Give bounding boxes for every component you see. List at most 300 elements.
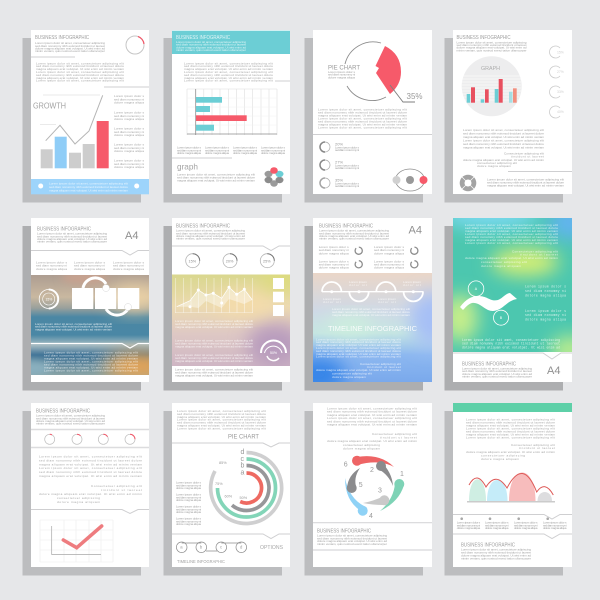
stat rings: 27% [557,70,564,74]
body text: consectetuer adipiscing elit [477,161,517,165]
footer text: sed diam nonummy nibh euismod tincidunt ut laoreet dolore [487,180,564,184]
wave graphic [460,281,517,325]
side text: Lorem ipsum dolor s [176,516,201,520]
side text: Lorem ipsum dolor s [176,492,201,496]
graph text: sed diam nonummy nibh euismod tincidunt ut laoreet dolore [177,175,255,179]
body text: magna aliquam erat volutpat. Ut wisi enim ad minim veniam [327,422,417,426]
body text: magna aliquam erat volutpat. Ut wisi enim ad minim veniam [36,67,124,71]
side text: dolore magna aliqua [525,293,566,297]
A4 label: A4 [547,365,560,377]
pie text [328,70,355,79]
captions: sed diam nonummy ni [205,148,229,152]
body text: consectetuer adipiscing [343,443,380,447]
timeline labels: Lorem ipsum [378,297,396,301]
body text: Consectetuer adipiscing elit [372,432,417,436]
title: BUSINESS INFOGRAPHIC [456,35,511,41]
intro text: minim veniam, quis nostrud exerci tation ullamcorper [176,237,245,241]
three text columns: Lorem ipsum dolor s [74,260,105,264]
intro text: sed diam nonummy nibh euismod tincidunt ut laoreet [319,231,389,235]
side text: dolore magna aliqua [176,486,201,490]
body text: magna aliquam erat volutpat. Ut wisi enim ad minim veniam [36,76,124,80]
photo body text: dolore magna aliquam erat volutpat. Ut wisi enim ad minim [316,368,401,372]
icon: flower [264,167,284,187]
chart in circle [462,56,522,116]
graph text: Lorem ipsum dolor sit amet, consectetuer adipiscing elit [177,172,255,176]
stat list: 27% [335,160,343,164]
photo body text: Lorem ipsum dolor sit amet, consectetuer adipiscing elit [316,355,401,359]
body text: consectetuer adipiscing [481,454,525,458]
options timeline: d [240,545,243,550]
side text: sed diam nonummy ni [114,130,144,134]
photo body text: tincidunt ut laoreet [367,365,401,369]
side text [114,94,144,169]
options timeline: b [200,545,203,550]
body text: sed diam nonummy nibh euismod tincidunt ut laoreet dolore [463,142,544,146]
photo body text [316,337,401,379]
intro text: sed diam nonummy nibh euismod tincidunt ut laoreet [36,416,105,420]
stat list: Lorem ipsum dolor s [335,164,359,168]
body text: tincidunt ut laoreet [511,155,544,159]
photo text: Lorem ipsum dolor sit amet, consectetuer adipiscing elit [175,319,253,323]
side text: dolore magna aliqua [114,117,144,121]
photo text: sed diam nonummy nibh euismod tincidunt ut laoreet dolore [465,235,558,239]
blue footer: sed diam nonummy nibh euismod tincidunt ut laoreet dolore [49,185,128,189]
captions: sed diam nonummy ni [177,148,201,152]
body text: Lorem ipsum dolor sit amet, consectetuer adipiscing elit [463,138,544,142]
concentric ring chart: 75% [215,482,223,486]
donut icon [39,290,58,308]
body text: Lorem ipsum dolor sit amet, consectetuer adipiscing elit [184,70,273,74]
intro text: Lorem ipsum dolor sit amet, consectetuer adipiscing [36,414,105,418]
side text: Lorem ipsum dolor s [525,285,566,289]
intro text: sed diam nonummy nibh euismod tincidunt ut laoreet [37,234,107,238]
page 1: growth [22,30,149,202]
intro text: Lorem ipsum dolor sit amet, consectetuer adipiscing [461,548,531,552]
captions [177,146,285,155]
body text: dolore magna aliquam erat volutpat. Ut wisi enim ad minim [463,158,544,162]
timeline labels: dolor sit [378,300,396,304]
intro text [37,232,107,244]
body text: magna aliquam erat volutpat. Ut wisi enim ad minim veniam [39,474,142,478]
four text columns: Lorem ipsum dolor s [543,521,567,525]
captions: sed diam nonummy ni [261,148,285,152]
stat rings: 15% [557,50,564,54]
body text: Consectetuer adipiscing elit [504,151,544,155]
intro text: Lorem ipsum dolor sit amet, consectetuer adipiscing [35,41,105,45]
text and ring rows: Lorem ipsum dolor s [319,245,349,249]
four text columns: Lorem ipsum dolor s [485,521,509,525]
intro text: dolore magna aliquam erat volutpat. Ut wisi enim ad [461,554,531,558]
body text: sed diam nonummy nibh euismod tincidunt ut laoreet dolore [466,420,555,424]
stat rings: 33% [557,90,564,94]
bottom photo text: Lorem ipsum dolor sit amet, consectetuer adipiscing [462,338,560,342]
body text: sed diam nonummy nibh euismod tincidunt ut laoreet dolore [327,419,417,423]
body text [466,417,555,461]
body text: Lorem ipsum dolor sit amet, consectetuer adipiscing elit [184,79,273,83]
side text: dolore magna aliqua [176,498,201,502]
four text columns: dolore magna aliqua [543,526,567,530]
intro text: sed diam nonummy nibh euismod tincidunt ut laoreet [35,44,105,48]
intro text [462,366,532,378]
body text: sed diam nonummy nibh euismod tincidunt ut laoreet dolore [39,458,142,462]
body text: sed diam nonummy nibh euismod tincidunt ut laoreet dolore [36,73,124,77]
green header [453,403,572,412]
body text: sed diam nonummy nibh euismod tincidunt ut laoreet dolore [184,73,273,77]
text and ring rows: sed diam nonummy ni [319,262,349,266]
photo body text: magna aliquam erat volutpat. Ut wisi enim ad minim veniam [44,356,138,360]
body text: dolore magna aliquam [477,164,511,168]
body text: Lorem ipsum dolor sit amet, consectetuer adipiscing elit [463,128,544,132]
white squares with arcs [72,278,139,315]
heading: pie chart: PIE CHART [328,64,360,72]
gradient photo [313,273,432,382]
footer text: magna aliquam erat volutpat. Ut wisi enim ad minim veniam [487,183,564,187]
photo text: Lorem ipsum dolor sit amet, consectetuer adipiscing elit [465,241,558,245]
photo body text: Lorem ipsum dolor sit amet, consectetuer adipiscing elit [316,337,401,341]
captions: sed diam nonummy ni [233,148,257,152]
heading: timeline infographic: TIMELINE INFOGRAPHIC [328,324,418,333]
body text: sed diam nonummy nibh euismod tincidunt ut laoreet dolore [36,64,124,68]
page 9: check chart [22,403,149,576]
body text: magna aliquam erat volutpat. Ut wisi enim ad minim veniam [463,145,544,149]
photo body text: sed diam nonummy nibh euismod tincidunt ut laoreet dolore [44,362,138,366]
white boxes [273,278,284,316]
photo body text: Lorem ipsum dolor sit amet, consectetuer adipiscing elit [44,350,138,354]
bottom photo text: dolore magna aliquam erat volutpat. Ut wisi enim ad [462,346,560,350]
captions: dolore magna aliqua [177,151,201,155]
three text columns: sed diam nonummy ni [113,264,144,268]
intro text: Lorem ipsum dolor sit amet, consectetuer adipiscing [317,534,387,538]
line chart [40,95,103,144]
side text: sed diam nonummy ni [114,162,144,166]
intro text: minim veniam, quis nostrud exerci tation ullamcorper [461,556,531,560]
body text: sed diam nonummy nibh euismod tincidunt ut laoreet dolore [463,132,544,136]
body text: Lorem ipsum dolor sit amet, consectetuer adipiscing elit [327,416,417,420]
side text: sed diam nonummy ni [176,483,201,487]
photo text: sed diam nonummy nibh euismod tincidunt ut laoreet dolore [465,226,558,230]
swirl cycle diagram: 5 [359,482,363,489]
gauge: 50% [270,351,277,355]
check line chart [40,520,113,562]
intro text [319,229,389,240]
timeline labels: dolor sit [349,283,367,287]
title: BUSINESS INFOGRAPHIC [462,361,516,367]
three text columns: Lorem ipsum dolor s [36,260,67,264]
photo text: dolore magna aliquam [481,264,521,268]
four text columns: sed diam nonummy ni [457,523,481,527]
teal header: BUSINESS INFOGRAPHIC [176,35,230,41]
intro text [461,548,531,560]
four text columns: Lorem ipsum dolor s [514,521,538,525]
photo text: sed diam nonummy nibh euismod tincidunt ut laoreet dolore [175,356,253,360]
three text columns: sed diam nonummy ni [74,264,105,268]
three text columns: sed diam nonummy ni [36,264,67,268]
text and ring rows: sed diam nonummy ni [319,248,349,252]
side text: dolore magna aliqua [114,133,144,137]
body text: consectetuer adipiscing [57,496,100,500]
body text: magna aliquam erat volutpat. Ut wisi enim ad minim veniam [327,413,417,417]
chevron divider [31,510,149,514]
title: BUSINESS INFOGRAPHIC [35,35,89,41]
body text: sed diam nonummy nibh euismod tincidunt ut laoreet dolore [184,64,273,68]
swirl cycle diagram [344,456,404,520]
body text: Lorem ipsum dolor sit amet, consectetuer adipiscing elit [177,426,266,430]
donut icon: 15% [46,298,52,302]
body text: tincidunt ut laoreet [519,446,555,450]
chevron divider [453,353,572,359]
line chart [175,278,253,313]
teal header: minim veniam, quis nostrud exerci tation ullamcorper [176,48,246,52]
intro text: Lorem ipsum dolor sit amet, consectetuer adipiscing [176,229,245,233]
captions: Lorem ipsum dolor s [233,146,257,150]
swirl cycle diagram: 1 [400,471,404,478]
side text: Lorem ipsum dolor s [114,143,144,147]
stat list: sed diam nonummy ni [335,166,359,170]
side text: Lorem ipsum dolor s [114,127,144,131]
photo text: Lorem ipsum dolor sit amet, consectetuer adipiscing elit [35,322,112,326]
chart in circle: GRAPH [481,66,500,72]
timeline [322,282,424,301]
photo text: consectetuer adipiscing elit [481,260,527,264]
body text: magna aliquam erat volutpat. Ut wisi enim ad minim veniam [184,67,273,71]
gauge [261,340,286,361]
photo body text: consectetuer adipiscing elit [332,372,372,376]
side text: dolore magna aliqua [176,510,201,514]
body text: tincidunt ut laoreet [380,436,417,440]
intro text: dolore magna aliquam erat volutpat. Ut wisi enim ad [319,234,389,238]
callout: 35%: 35% [406,92,423,101]
side text: sed diam nonummy ni [525,289,566,293]
pie text: sed diam nonummy ni [328,73,355,77]
photo body text: sed diam nonummy nibh euismod tincidunt ut laoreet dolore [316,349,401,353]
blurred photo background [31,275,149,375]
options timeline: a [180,545,183,550]
photo body text: sed diam nonummy nibh euismod tincidunt ut laoreet dolore [316,340,401,344]
four text columns: sed diam nonummy ni [514,523,538,527]
four text columns: dolore magna aliqua [457,526,480,530]
body text: Lorem ipsum dolor sit amet, consectetuer adipiscing elit [466,417,555,421]
white chevron divider [31,344,149,348]
photo text: Lorem ipsum dolor sit amet, consectetuer adipiscing elit [175,339,253,343]
intro text: sed diam nonummy nibh euismod tincidunt ut laoreet [462,369,532,373]
pie text: dolore magna aliqua [328,75,355,79]
four text columns: dolore magna aliqua [514,526,538,530]
gradient photo [453,218,572,352]
stat list: sed diam nonummy ni [335,184,359,188]
intro text: minim veniam, quis nostrud exerci tation ullamcorper [462,374,532,378]
bar chart [41,121,109,168]
title: BUSINESS INFOGRAPHIC [176,224,230,230]
intro text: dolore magna aliquam erat volutpat. Ut wisi enim ad [462,372,532,376]
intro text: Lorem ipsum dolor sit amet, consectetuer adipiscing [462,366,532,370]
three text columns: dolore magna aliqua [74,267,105,271]
body text: tincidunt ut laoreet [101,488,142,492]
gradient photo [172,274,290,366]
page 5: A4 brochure with photo [22,218,149,390]
A4 label: A4 [408,224,422,236]
body text: sed diam nonummy nibh euismod tincidunt ut laoreet dolore [177,412,266,416]
teal header [172,31,290,54]
timeline labels: dolor sit [323,300,341,304]
body text: magna aliquam erat volutpat. Ut wisi enim ad minim veniam [466,423,555,427]
swirl cycle diagram: 3 [378,488,382,494]
teal header: dolore magna aliquam erat volutpat. Ut wisi enim ad [176,45,246,49]
body text [318,107,407,129]
intro text: dolore magna aliquam erat volutpat. Ut wisi enim ad [36,419,105,423]
bottom photo text [462,338,560,350]
timeline labels: Lorem ipsum [349,280,367,284]
percent rings [186,254,274,268]
photo body text: Lorem ipsum dolor sit amet, consectetuer adipiscing elit [44,359,138,363]
body text [327,406,417,450]
swirl cycle diagram: 2 [370,467,374,474]
concentric ring chart: 50% [240,496,248,500]
photo body text: Lorem ipsum dolor sit amet, consectetuer adipiscing elit [316,346,401,350]
body text: Lorem ipsum dolor sit amet, consectetuer adipiscing elit [177,418,266,422]
footer text: Lorem ipsum dolor sit amet, consectetuer adipiscing elit [175,367,253,371]
page 7: timeline infographic [304,218,432,390]
photo text: magna aliquam erat volutpat. Ut wisi enim ad minim veniam [175,359,253,363]
timeline labels: Lorem ipsum dolor sit amet, consectetuer adipiscing elit [332,307,410,311]
stat list [320,142,359,188]
body text [463,128,544,168]
chevron divider [172,443,290,447]
body text: sed diam nonummy nibh euismod tincidunt ut laoreet dolore [318,110,407,114]
timeline labels: dolor sit [403,283,421,287]
percent rings: 25% [263,259,271,263]
captions: dolore magna aliqua [205,151,229,155]
body text: sed diam nonummy nibh euismod tincidunt ut laoreet dolore [177,421,266,425]
text and ring rows: dolore magna aliqua [374,251,404,255]
concentric ring chart: d [240,449,244,456]
timeline labels: sed diam nonummy nibh euismod tincidunt ut laoreet dolore [332,310,410,314]
chevron divider [31,250,149,255]
body text: Lorem ipsum dolor sit amet, consectetuer adipiscing elit [39,466,142,470]
progress rings [45,434,135,444]
timeline labels [323,280,421,317]
side text: Lorem ipsum dolor s [114,159,144,163]
four text columns: Lorem ipsum dolor s [457,521,481,525]
timeline labels: Lorem ipsum [403,280,421,284]
captions: Lorem ipsum dolor s [177,146,201,150]
title: BUSINESS INFOGRAPHIC [319,224,373,230]
page 8: wave on green gradient [444,218,572,390]
intro text: dolore magna aliquam erat volutpat. Ut wisi enim ad [37,237,107,241]
body text: dolore magna aliquam [343,446,380,450]
intro text: minim veniam, quis nostrud exerci tation ullamcorper [319,236,389,240]
options timeline: c [220,545,222,550]
body text: dolore magna aliquam erat volutpat. Ut wisi enim ad minim [327,439,417,443]
side text: sed diam nonummy ni [114,114,144,118]
body text: dolore magna aliquam erat volutpat. Ut wisi enim ad minim [39,492,142,496]
photo body text: Consectetuer adipiscing elit [360,362,401,366]
options timeline [176,542,247,553]
intro text [35,41,105,53]
concentric ring chart: b [240,462,244,470]
photo text: Lorem ipsum dolor sit amet, consectetuer adipiscing elit [175,353,253,357]
photo text [175,319,253,363]
heading: growth: GROWTH [33,102,66,110]
stat list: Lorem ipsum dolor s [335,182,359,186]
body text [39,455,142,504]
page 11: swirl cycle [304,403,432,576]
body text [36,61,124,83]
body text [177,409,266,430]
title: BUSINESS INFOGRAPHIC [36,408,90,414]
side text: sed diam nonummy ni [176,519,201,523]
side text: dolore magna aliqua [525,317,566,321]
footer text: Lorem ipsum dolor sit amet, consectetuer adipiscing elit [487,177,564,181]
four text columns: sed diam nonummy ni [485,523,509,527]
blue footer: Lorem ipsum dolor sit amet, consectetuer adipiscing elit [49,182,128,186]
stat list: 35% [335,178,343,182]
text and ring rows: dolore magna aliqua [319,251,349,255]
wave graphic: B [500,316,503,320]
photo body text: dolore magna aliquam [332,375,366,379]
title: BUSINESS INFOGRAPHIC [317,528,371,534]
intro text [317,534,387,546]
four text columns: sed diam nonummy ni [543,523,567,527]
heading: graph: graph [177,162,198,172]
page 2: graph [164,30,290,202]
intro text: minim veniam, quis nostrud exerci tation ullamcorper [317,542,387,546]
footer text: sed diam nonummy nibh euismod tincidunt ut laoreet dolore [175,370,253,374]
text and ring rows: Lorem ipsum dolor s [374,245,404,249]
page 6: line chart on gradient [164,218,303,390]
body text: Lorem ipsum dolor sit amet, consectetuer adipiscing elit [36,70,124,74]
page 10: concentric pie chart [164,403,290,576]
body text: dolore magna aliquam [481,457,519,461]
intro text [36,414,105,426]
side text [525,285,566,321]
text and ring rows [319,245,418,270]
body text: magna aliquam erat volutpat. Ut wisi enim ad minim veniam [177,424,266,428]
footer text [487,177,564,187]
side text [176,480,201,526]
chevron divider [453,534,572,538]
page 12: hump chart [444,403,572,576]
A4 label: A4 [125,230,138,242]
timeline infographic label: TIMELINE INFOGRAPHIC [177,559,226,564]
side text: dolore magna aliqua [114,101,144,105]
body text: magna aliquam erat volutpat. Ut wisi enim ad minim veniam [463,135,544,139]
swirl cycle diagram: 4 [369,513,373,520]
four text columns [457,517,567,530]
blue footer: magna aliquam erat volutpat. Ut wisi enim ad minim veniam [49,188,128,192]
footer text [175,367,253,377]
intro text: Lorem ipsum dolor sit amet, consectetuer adipiscing [319,229,389,233]
captions: dolore magna aliqua [233,151,257,155]
intro text: dolore magna aliquam erat volutpat. Ut wisi enim ad [35,46,105,50]
concentric ring chart: 60% [224,494,233,498]
intro text: sed diam nonummy nibh euismod tincidunt ut laoreet [456,43,527,47]
concentric ring chart [211,449,282,523]
side text: Lorem ipsum dolor s [176,504,201,508]
graph text: magna aliquam erat volutpat. Ut wisi enim ad minim veniam [177,178,255,182]
three text columns [36,260,144,271]
photo body text: Lorem ipsum dolor sit amet, consectetuer adipiscing elit [44,368,138,372]
photo text: dolore magna aliquam erat volutpat. Ut wisi enim ad minim [465,256,558,260]
captions: dolore magna aliqua [261,151,285,155]
timeline labels: magna aliquam erat volutpat. Ut wisi enim ad minim veniam [332,313,410,317]
intro text: dolore magna aliquam erat volutpat. Ut wisi enim ad [456,46,527,50]
text and ring rows: sed diam nonummy ni [374,248,404,252]
body text: sed diam nonummy nibh euismod tincidunt ut laoreet dolore [39,470,142,474]
teal header: sed diam nonummy nibh euismod tincidunt ut laoreet [176,43,246,47]
text and ring rows: dolore magna aliqua [374,266,404,270]
graph text [177,172,255,182]
photo text: magna aliquam erat volutpat. Ut wisi enim ad minim veniam [175,325,253,329]
